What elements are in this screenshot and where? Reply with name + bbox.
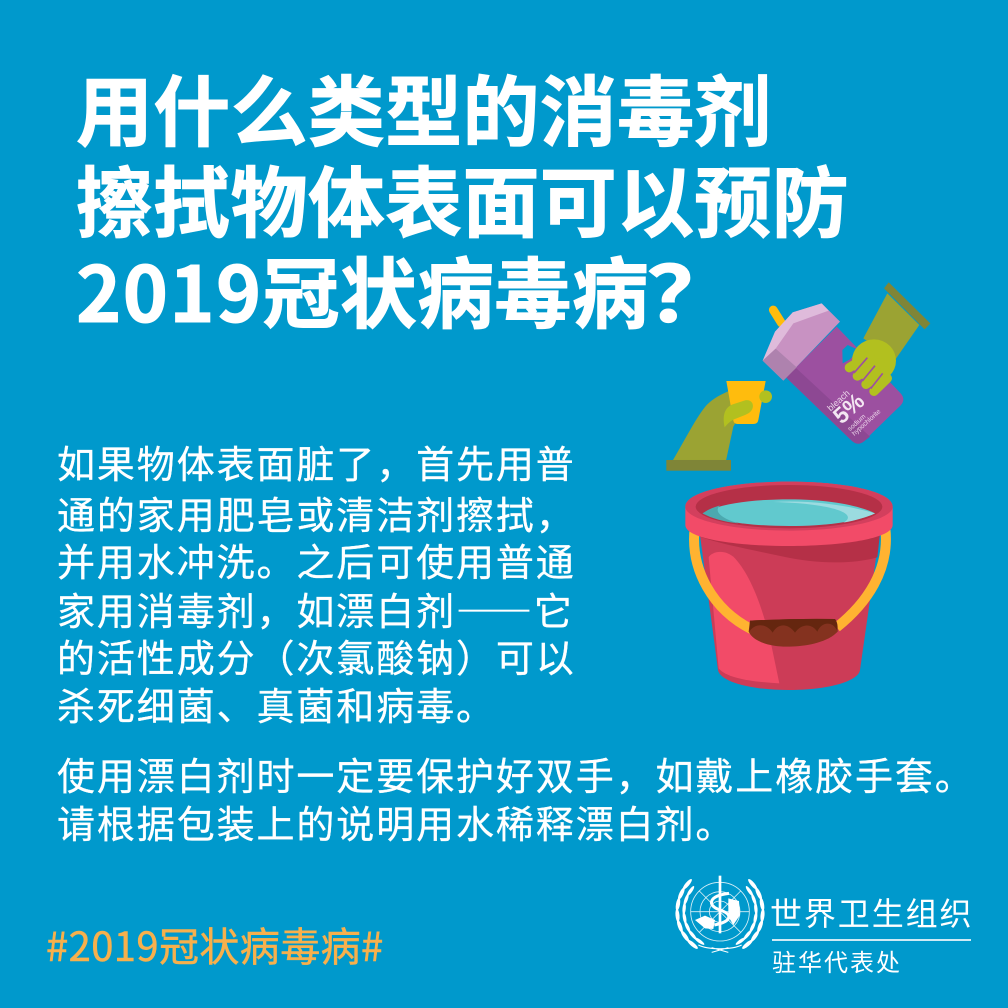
icon: yellow cup <box>726 381 766 424</box>
logo text: China office: 驻华代表处 <box>772 943 902 978</box>
text block: cleaning steps: 的活性成分（次氯酸钠）可以 <box>57 628 576 683</box>
logo: divider <box>772 939 971 941</box>
arm: left sleeve <box>666 391 739 471</box>
title: ？ <box>646 234 739 345</box>
text block: cleaning steps: 如果物体表面脏了，首先用普 <box>57 434 576 489</box>
text block: cleaning steps: 并用水冲洗。之后可使用普通 <box>57 532 576 587</box>
icon: bleach bottle: sodium <box>847 413 868 433</box>
title: 用什么类型的消毒剂 <box>76 52 772 163</box>
icon: bleach bottle: 5% <box>828 387 869 429</box>
bucket body <box>699 530 880 690</box>
rim <box>685 482 893 546</box>
water <box>703 499 875 526</box>
text block: gloves and dilution: 请根据包装上的说明用水稀释漂白剂。 <box>57 794 735 849</box>
text block: cleaning steps: 杀死细菌、真菌和病毒。 <box>57 676 496 731</box>
text block: gloves and dilution: 使用漂白剂时一定要保护好双手，如戴上橡胶手套。 <box>57 746 975 801</box>
text block: cleaning steps: 通的家用肥皂或清洁剂擦拭， <box>57 485 576 540</box>
hand: left glove <box>724 390 772 427</box>
handle <box>694 528 886 629</box>
logo text: World Health Organization: 世界卫生组织 <box>770 889 973 935</box>
icon: red bucket <box>685 482 893 690</box>
icon: bleach bottle: hypochlorite <box>851 408 883 437</box>
title: 擦拭物体表面可以预防 <box>76 143 849 254</box>
hashtag: #2019冠状病毒病# <box>46 915 384 973</box>
arm: right sleeve and glove <box>849 282 930 391</box>
text block: cleaning steps <box>57 434 576 731</box>
handle grip <box>749 619 838 647</box>
text block: cleaning steps: 家用消毒剂，如漂白剂——它 <box>57 581 574 636</box>
text block: gloves and dilution <box>57 746 975 849</box>
title: 2019冠状病毒病 <box>76 234 649 345</box>
logo: WHO emblem <box>675 876 765 952</box>
title <box>76 52 849 345</box>
icon: bleach bottle <box>763 303 903 444</box>
icon: bleach bottle: bleach <box>825 388 852 413</box>
